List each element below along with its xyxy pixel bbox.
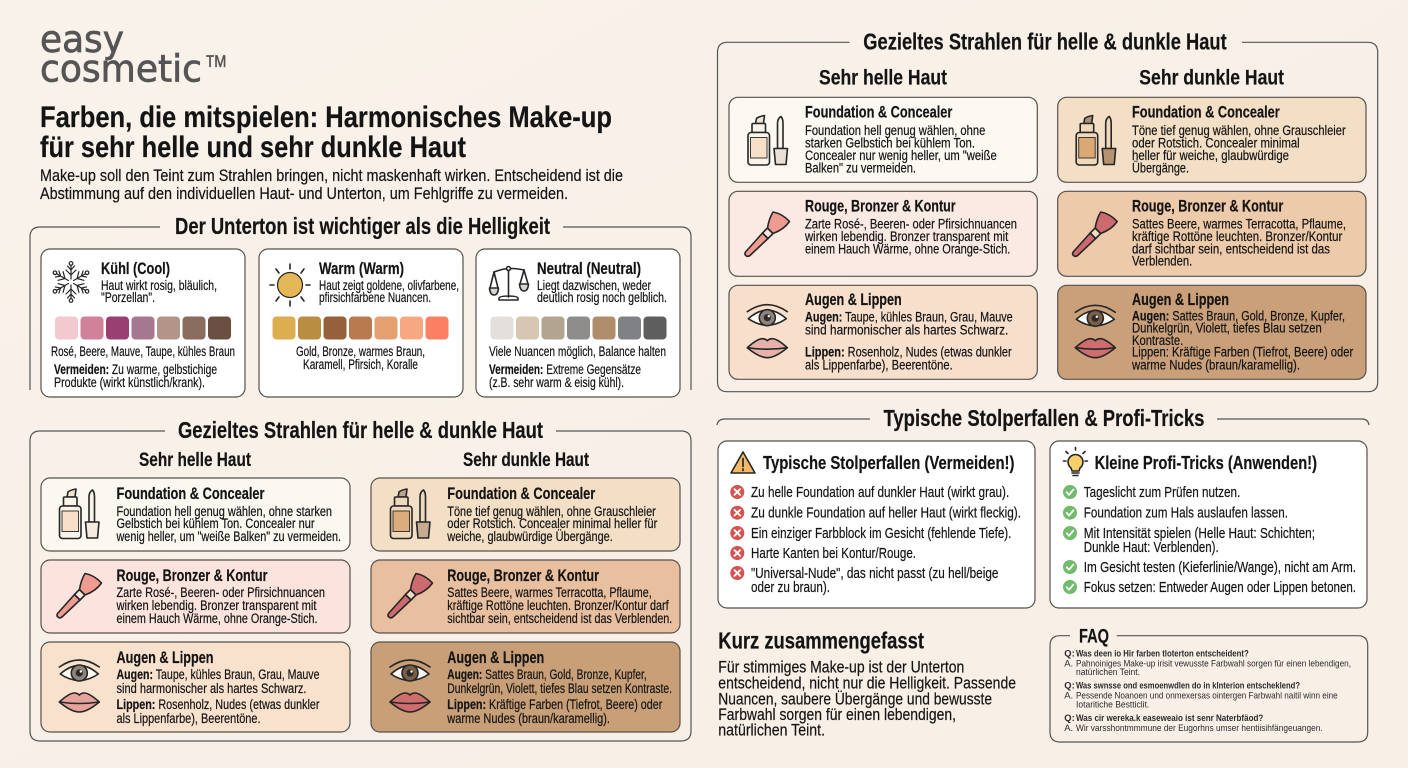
icon: brush [745,212,790,256]
avoid note: cool: Vermeiden: Zu warme, gelbstichige [54,362,217,377]
body text: Übergänge. [1132,160,1189,175]
icon: foundation bottle and concealer [390,489,430,538]
icon: lips [1075,339,1115,358]
icon: eye [1075,305,1115,326]
question and answer 2: Was swnsse ond esmoenwdlen do in klnterion entscheklend? [1076,679,1300,690]
question and answer 3: A. [1064,722,1073,733]
body text [446,504,658,544]
question and answer 3: Wir varsshontmmmune der Eugorhns umser hentiisihfängeuangen. [1076,722,1323,733]
body text: einem Hauch Wärme, ohne Orange-Stich. [116,611,318,626]
logo: cosmetic [40,48,202,90]
icon: brush [57,574,102,618]
colour names: warm [296,344,425,372]
card: dark blush [371,560,680,633]
heading: Foundation & Concealer [805,103,953,122]
body text [447,585,672,626]
icon: eye [747,305,787,326]
swatches: neutral [490,316,666,340]
list: pitfalls: Harte Kanten bei Kontur/Rouge. [751,545,916,562]
card: light blush [41,560,350,633]
body text: Lippen: Kräftige Farben (Tiefrot, Beere) oder [447,697,663,712]
list: pitfalls: Ein einziger Farbblock im Gesicht (fehlende Tiefe). [751,525,1011,542]
heading: Foundation & Concealer [447,484,596,503]
body text: Lippen: Rosenholz, Nudes (etwas dunkler [805,345,1012,360]
body text: Kontraste. [1132,333,1183,348]
icon: lips [747,339,787,358]
intro text: Abstimmung auf den individuellen Haut- und Unterton, um Fehlgriffe zu vermeiden. [40,184,568,203]
colour names: warm: Gold, Bronze, warmes Braun, [296,344,425,359]
panel: undertone [30,213,691,397]
heading: Rouge, Bronzer & Kontur [805,197,956,216]
list: pitfalls [730,484,1021,596]
question and answer 3: Was cir wereka.k easeweaio ist senr Naterbfäod? [1076,712,1264,723]
question and answer 1: natürlichen Teint. [1076,666,1140,677]
body text: Balken" zu vermeiden. [805,160,916,175]
colour names: cool: Rosé, Beere, Mauve, Taupe, kühles Braun [51,344,235,359]
body text: Augen: Taupe, kühles Braun, Grau, Mauve [116,667,320,682]
list: tricks [1063,484,1356,596]
heading: cool: Kühl (Cool) [101,259,170,278]
question and answer 3 [1064,712,1323,733]
swatches: warm [272,316,448,340]
icon: foundation bottle and concealer [1076,116,1116,165]
card: dark foundation [371,478,680,551]
heading: Augen & Lippen [1132,290,1229,309]
list: tricks: Mit Intensität spielen (Helle Haut: Schichten; [1084,525,1315,542]
intro text: Make-up soll den Teint zum Strahlen bringen, nicht maskenhaft wirken. Entscheidend ist die [40,166,623,185]
heading: Foundation & Concealer [116,484,265,503]
body text: Gelbstich bei kühlem Ton. Concealer nur [116,516,315,531]
heading: Rouge, Bronzer & Kontur [1132,197,1284,216]
body text: warme Nudes (braun/karamellig). [1131,357,1300,372]
list: tricks: Foundation zum Hals auslaufen lassen. [1084,504,1288,522]
heading: targeted glow: Gezieltes Strahlen für helle & dunkle Haut [178,417,543,443]
title: für sehr helle und sehr dunkle Haut [40,131,466,164]
body text [804,216,1017,256]
body text: heller für weiche, glaubwürdige [1132,148,1289,163]
body text: oder Rotstich. Concealer minimal [1132,135,1300,150]
description: neutral [537,278,667,305]
card: dark eyes and lips [371,642,680,732]
description: neutral: Liegt dazwischen, weder [537,278,651,293]
heading: pitfalls and tricks: Typische Stolperfallen & Profi-Tricks [884,405,1204,431]
heading: Augen & Lippen [116,648,214,667]
list: tricks: Dunkle Haut: Verblenden). [1084,539,1219,556]
card: warm [259,249,463,397]
heading: FAQ: FAQ [1079,625,1109,647]
heading: pitfalls: Typische Stolperfallen (Vermeiden!) [763,452,1014,473]
card: light foundation [729,97,1037,182]
icon: lips [59,693,99,712]
body text: Sattes Beere, warmes Terracotta, Pflaume, [447,585,652,600]
intro text [40,166,623,203]
summary: Farbwahl sorgen für einen lebendigen, [718,705,956,724]
body text: kräftige Rottöne leuchten. Bronzer/Kontur darf [447,598,669,613]
body text: Lippen: Rosenholz, Nudes (etwas dunkler [116,697,320,712]
summary: entscheidend, nicht nur die Helligkeit. Passende [718,673,1016,692]
colour names: warm: Karamell, Pfirsich, Koralle [303,357,418,372]
body text: Sattes Beere, warmes Terracotta, Pflaume, [1132,216,1346,231]
question and answer 2 [1064,679,1338,710]
heading: neutral: Neutral (Neutral) [537,259,641,278]
logo [40,18,228,90]
question and answer 1: Pahnoiniges Make-up irisit vewusste Farbwahl sorgen für einen lebendigen, [1076,658,1351,669]
description: cool: "Porzellan". [101,290,155,305]
body text: Dunkelgrün, Violett, tiefes Blau setzen Kontraste. [447,681,672,696]
body text: Lippen: Kräftige Farben (Tiefrot, Beere) oder [1132,345,1354,360]
body text: Concealer nur wenig heller, um "weiße [805,148,997,163]
heading: Augen & Lippen [447,648,544,667]
body text: kräftige Rottöne leuchten. Bronzer/Kontur [1132,229,1343,244]
list: pitfalls: Zu helle Foundation auf dunkler Haut (wirkt grau). [751,484,1009,501]
body text: darf sichtbar sein, entscheidend ist das [1132,241,1330,256]
card: light eyes and lips [41,642,350,732]
body text: Zarte Rosé-, Beeren- oder Pfirsichnuancen [805,216,1017,231]
heading: undertone: Der Unterton ist wichtiger als die Helligkeit [175,213,550,239]
card: tricks [1050,441,1367,608]
list: tricks: Tageslicht zum Prüfen nutzen. [1084,484,1240,501]
title [40,101,612,164]
list: pitfalls: Zu dunkle Foundation auf heller Haut (wirkt fleckig). [751,504,1021,522]
icon: brush [388,574,432,618]
panel: targeted glow, lower left [30,417,691,741]
body text [805,310,1013,372]
card: cool [41,249,245,397]
avoid note: cool [54,362,217,390]
question and answer 1 [1064,648,1351,677]
body text: wirken lebendig. Bronzer transparent mit [116,598,317,613]
icon: eye [59,660,99,681]
list: pitfalls: "Universal-Nude", das nicht passt (zu hell/beige [751,565,998,582]
body text [805,123,997,175]
card: dark blush [1058,191,1366,276]
question and answer 1: Was deen io Hir farben tloterton entscheident? [1076,648,1249,659]
avoid note: cool: Produkte (wirkt künstlich/krank). [54,375,205,390]
card: pitfalls [718,441,1035,608]
body text: Foundation hell genug wählen, ohne [805,123,985,138]
heading: Foundation & Concealer [1132,103,1280,122]
summary: Nuancen, saubere Übergänge und bewusste [718,689,992,708]
body text: weiche, glaubwürdige Übergänge. [446,529,613,544]
title: Farben, die mitspielen: Harmonisches Make-up [40,101,612,134]
icon: lips [390,693,430,712]
logo: easy [40,18,124,61]
body text: Töne tief genug wählen, ohne Grauschleier [447,504,656,519]
body text: Dunkelgrün, Violett, tiefes Blau setzen [1132,321,1322,336]
subheading: very light skin: Sehr helle Haut [819,65,947,89]
summary: natürlichen Teint. [718,721,825,740]
avoid note: neutral: Vermeiden: Extreme Gegensätze [489,362,641,377]
heading: Rouge, Bronzer & Kontur [447,566,599,585]
heading: tricks: Kleine Profi-Tricks (Anwenden!) [1095,452,1317,473]
body text: starken Gelbstich bei kühlem Ton. [805,135,975,150]
body text: oder Rotstich. Concealer minimal heller für [447,516,658,531]
panel: targeted glow, upper right [718,28,1378,392]
body text: sichtbar sein, entscheidend ist das Verblenden. [447,611,672,626]
body text: Zarte Rosé-, Beeren- oder Pfirsichnuancen [116,585,325,600]
body text: wenig heller, um "weiße Balken" zu vermeiden. [116,529,341,544]
card: light blush [729,191,1037,276]
body text: Foundation hell genug wählen, ohne starken [116,504,332,519]
subheading: very dark skin: Sehr dunkle Haut [1139,65,1284,89]
body text: warme Nudes (braun/karamellig). [446,711,610,726]
card: light foundation [41,478,350,551]
description: cool [101,278,217,305]
body text: sind harmonischer als hartes Schwarz. [116,681,306,696]
body text: Augen: Taupe, kühles Braun, Grau, Mauve [805,310,1013,325]
body text: Verblenden. [1132,254,1192,269]
colour names: neutral: Viele Nuancen möglich, Balance halten [489,344,666,359]
description: cool: Haut wirkt rosig, bläulich, [101,278,217,293]
question and answer 1: A. [1064,658,1073,669]
body text: Augen: Sattes Braun, Gold, Bronze, Kupfer, [447,667,647,682]
body text [116,667,320,726]
panel: pitfalls and tricks [717,405,1369,608]
icon: sun [270,264,310,306]
logo: ™ [204,49,228,84]
summary: Für stimmiges Make-up ist der Unterton [718,658,964,677]
card: dark eyes and lips [1058,285,1366,379]
list: pitfalls: oder zu braun). [751,579,830,596]
question and answer 2: Q: [1064,679,1075,690]
body text [116,585,325,626]
description: warm: Haut zeigt goldene, olivfarbene, [319,278,459,293]
description: warm [319,278,459,305]
body text [1132,123,1346,175]
icon: brush [1073,212,1117,256]
icon: light bulb [1064,448,1088,476]
summary: Kurz zusammengefasst [718,627,924,653]
swatches: cool [55,316,231,340]
description: warm: pfirsichfarbene Nuancen. [319,290,431,305]
body text [1131,309,1354,372]
body text: sind harmonischer als hartes Schwarz. [805,322,1008,337]
avoid note: neutral: (z.B. sehr warm & eisig kühl). [489,375,624,390]
icon: scales [490,266,528,300]
card: dark foundation [1058,97,1366,182]
body text: einem Hauch Wärme, ohne Orange-Stich. [805,241,1010,256]
body text [116,504,341,544]
body text: als Lippenfarbe), Beerentöne. [805,357,953,372]
subheading: very dark skin: Sehr dunkle Haut [463,449,589,471]
description: neutral: deutlich rosig noch gelblich. [537,290,667,305]
body text: wirken lebendig. Bronzer transparent mit [804,229,1009,244]
icon: foundation bottle and concealer [60,489,99,538]
heading: targeted glow: Gezieltes Strahlen für helle & dunkle Haut [863,28,1227,54]
heading: Rouge, Bronzer & Kontur [116,566,268,585]
icon: foundation bottle and concealer [748,116,788,165]
subheading: very light skin: Sehr helle Haut [139,449,251,471]
card: light eyes and lips [729,285,1037,379]
card: neutral [476,249,680,397]
body text: Augen: Sattes Braun, Gold, Bronze, Kupfer, [1132,309,1345,324]
body text [1132,216,1346,269]
question and answer 1: Q: [1064,648,1075,659]
icon: snowflake [51,262,91,302]
icon: warning triangle [731,452,755,473]
body text: als Lippenfarbe), Beerentöne. [116,711,260,726]
icon: eye [390,660,430,681]
question and answer 2: Pessende Noanoen und onmexersas ointergen Farbwahl naitil winn eine [1076,689,1338,700]
heading: warm: Warm (Warm) [319,259,404,278]
question and answer 2: Iotaritiche Bestticlit. [1076,699,1149,710]
question and answer 3: Q: [1064,712,1075,723]
summary [718,627,1016,740]
heading: Augen & Lippen [805,290,902,309]
panel: FAQ [1050,625,1368,742]
avoid note: neutral [489,362,641,390]
body text [446,667,672,726]
body text: Töne tief genug wählen, ohne Grauschleier [1132,123,1346,138]
question and answer 2: A. [1064,689,1073,700]
